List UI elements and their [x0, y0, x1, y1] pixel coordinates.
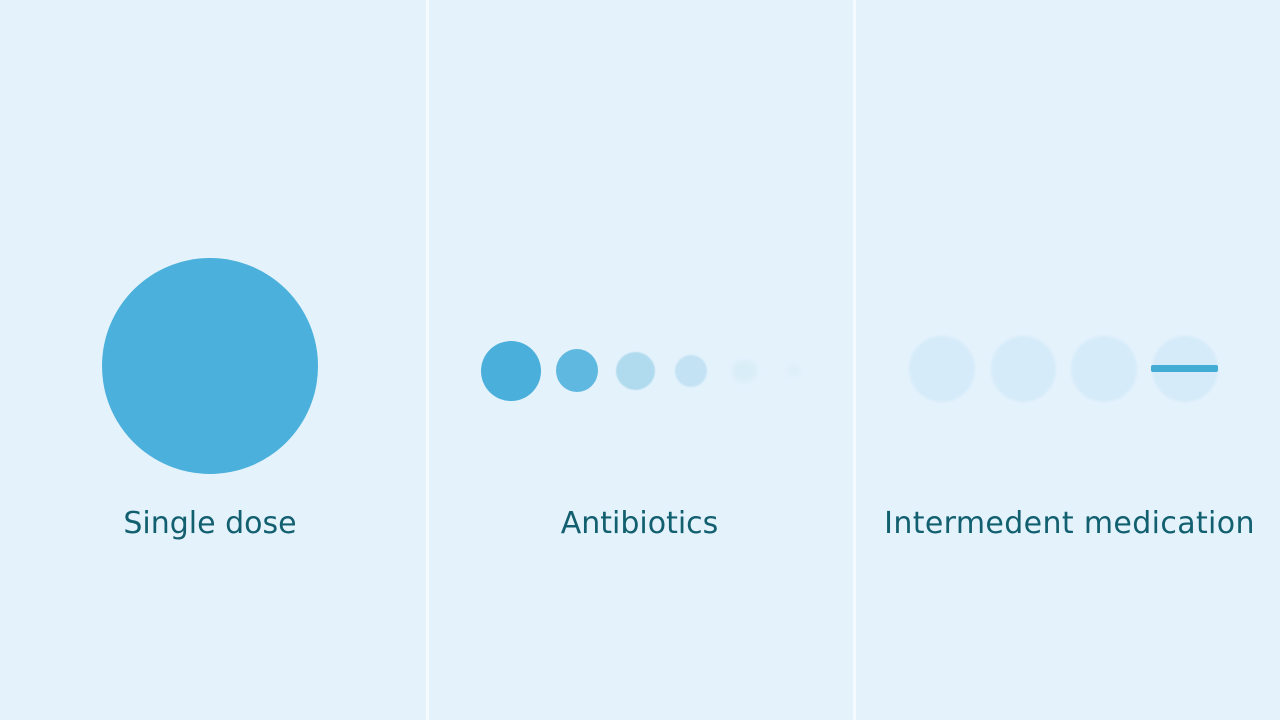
label: intermedent medication: Intermedent medication — [884, 506, 1255, 541]
panel: intermedent medication — [884, 336, 1255, 541]
icon: fading dose circles — [481, 341, 756, 401]
panel divider right — [853, 0, 856, 720]
panel: antibiotics — [481, 341, 756, 541]
label: single dose: Single dose — [123, 506, 297, 541]
icon: large dose circle — [102, 258, 318, 474]
panel divider left — [426, 0, 429, 720]
panel: single dose — [102, 258, 318, 541]
icon: pale dose circles with bar — [909, 336, 1218, 402]
label: antibiotics: Antibiotics — [561, 506, 718, 541]
